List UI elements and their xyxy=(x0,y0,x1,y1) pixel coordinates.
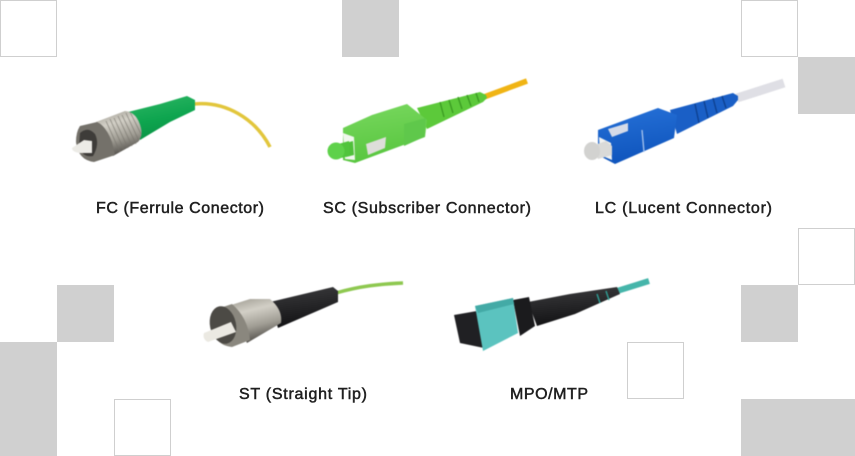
connector: ST xyxy=(204,283,403,347)
label: FC: FC (Ferrule Conector) xyxy=(96,200,264,217)
connector: LC xyxy=(584,83,784,164)
connector: FC xyxy=(72,96,270,162)
connector: MPO/MTP xyxy=(454,281,649,351)
label: LC: LC (Lucent Connector) xyxy=(595,200,772,217)
label: ST: ST (Straight Tip) xyxy=(239,386,367,403)
label: MPO/MTP: MPO/MTP xyxy=(510,386,588,403)
label: SC: SC (Subscriber Connector) xyxy=(323,200,531,217)
connector: SC xyxy=(328,81,527,163)
